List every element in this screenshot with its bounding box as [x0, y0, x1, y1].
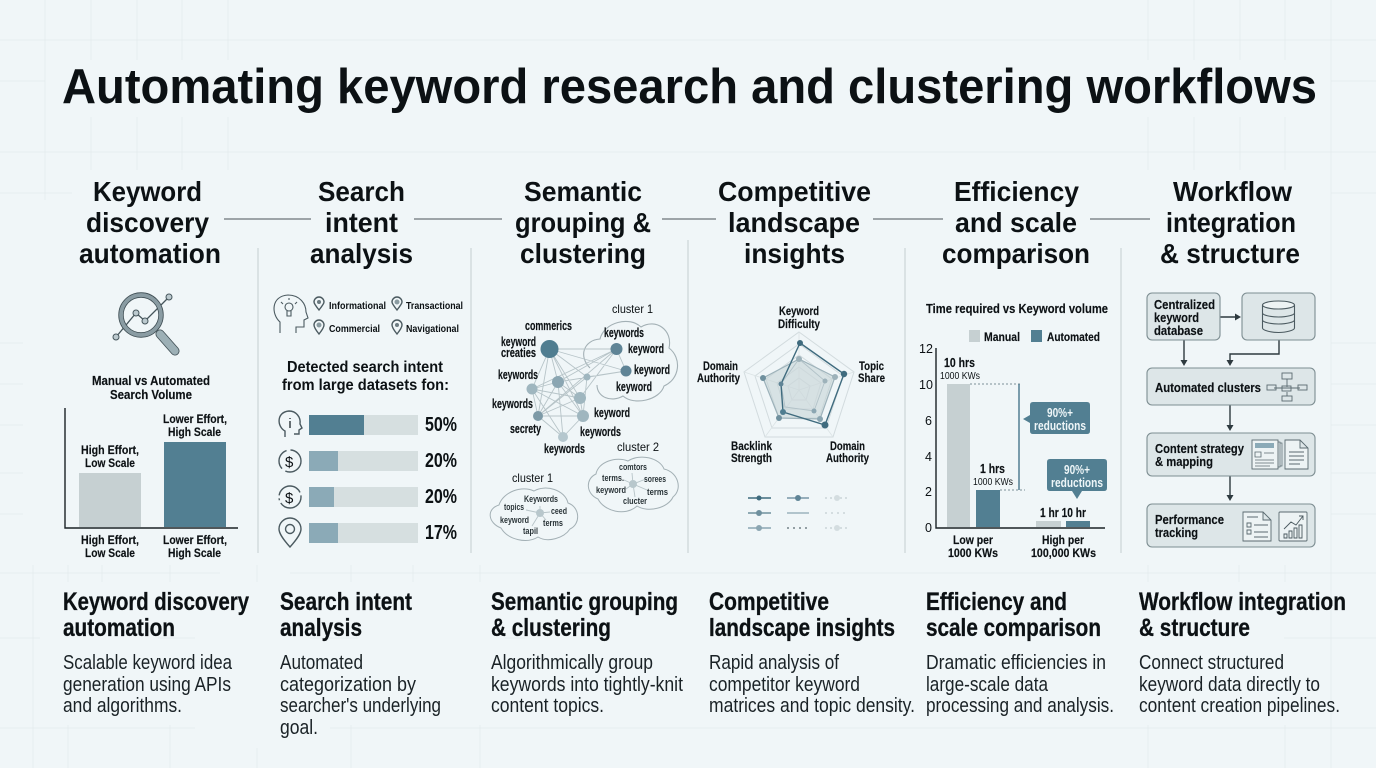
bar chart: time vs keyword volume: 12	[919, 342, 933, 356]
cloud: lower cluster 1: cluster 1	[512, 471, 553, 485]
heading: semantic grouping and clustering: grouping &	[515, 207, 651, 238]
box: content strategy and mapping: & mapping	[1155, 455, 1213, 469]
labels: radar axes: Keyword	[779, 306, 819, 318]
summary: semantic grouping and clustering: Algorithmically group	[491, 652, 653, 674]
cloud: cluster 2: comtors	[619, 462, 647, 473]
bar chart: time vs keyword volume: 6	[925, 414, 932, 428]
heading: workflow integration and structure	[1160, 176, 1300, 269]
box: performance tracking: tracking	[1155, 526, 1198, 540]
summary: keyword discovery automation: automation	[63, 614, 175, 642]
heading: semantic grouping and clustering: Semantic	[524, 176, 642, 207]
box: performance tracking: Performance	[1155, 513, 1224, 527]
summary: semantic grouping and clustering: Semantic grouping	[491, 588, 678, 616]
bar chart: effort vs scale: High Scale	[168, 427, 221, 439]
summary: efficiency and scale comparison: scale comparison	[926, 614, 1101, 642]
summary: search intent analysis: Search intent	[280, 588, 413, 616]
chart title: manual vs automated: Manual vs Automated	[92, 374, 210, 388]
callout: 90%+ reductions upper	[1023, 402, 1090, 434]
box: centralized keyword database: keyword	[1154, 311, 1199, 325]
bar chart: time vs keyword volume	[919, 342, 1105, 560]
panel: competitive landscape insights	[697, 176, 915, 717]
heading: workflow integration and structure: Workflow	[1173, 176, 1292, 207]
summary: competitive landscape insights: competitor keyword	[709, 674, 860, 696]
panel: semantic grouping and clustering	[490, 176, 683, 717]
summary: competitive landscape insights: landscape insights	[709, 614, 895, 642]
labels: radar axes: Domain	[703, 361, 738, 373]
summary: competitive landscape insights: Rapid analysis of	[709, 652, 839, 674]
flowchart: workflow pipeline	[1147, 293, 1315, 547]
bar chart: effort vs scale: High Effort,	[81, 535, 139, 547]
bar chart: time vs keyword volume: 1 hr 10 hr	[1040, 506, 1086, 520]
box: database icon	[1242, 293, 1315, 340]
bar chart: effort vs scale	[65, 408, 238, 560]
summary: efficiency and scale comparison: processing and analysis.	[926, 695, 1114, 717]
labels: network keywords: keywords	[580, 425, 621, 439]
cloud: cluster 2: clucter	[623, 496, 647, 507]
callout: 90%+ reductions upper: reductions	[1034, 418, 1086, 433]
heading: semantic grouping and clustering	[515, 176, 651, 269]
legend: radar series	[748, 495, 849, 531]
legend: intent types: Transactional	[406, 300, 463, 312]
labels: network keywords: secrety	[510, 422, 541, 436]
labels: network keywords: keywords	[498, 368, 538, 382]
bar chart: effort vs scale: Low Scale	[85, 548, 135, 560]
bar chart: time vs keyword volume: 2	[925, 485, 932, 499]
labels: radar axes: Difficulty	[778, 319, 821, 331]
heading: search intent analysis	[310, 176, 413, 269]
icon: head with lightbulb	[274, 295, 308, 333]
summary: competitive landscape insights: Competitive	[709, 588, 829, 616]
heading: competitive landscape insights	[718, 176, 871, 269]
labels: network keywords: keywords	[544, 442, 585, 456]
cloud: lower cluster 1: ceed	[551, 506, 567, 517]
network graph: keyword nodes	[526, 340, 632, 442]
heading: efficiency and scale comparison: Efficiency	[954, 176, 1079, 207]
summary: efficiency and scale comparison: large-scale data	[926, 674, 1049, 696]
legend: manual and automated: Manual	[984, 332, 1020, 344]
bar chart: time vs keyword volume: 10	[919, 378, 933, 392]
cloud: cluster 2	[588, 440, 678, 512]
box: centralized keyword database: database	[1154, 324, 1203, 338]
heading: efficiency and scale comparison: comparison	[942, 238, 1090, 269]
bar chart: intent shares: $	[285, 490, 294, 507]
bar chart: intent shares: 20%	[425, 450, 457, 472]
chart title: detected search intent: Detected search intent	[287, 359, 444, 376]
heading: competitive landscape insights: Competitive	[718, 176, 871, 207]
summary: keyword discovery automation: Scalable keyword idea	[63, 652, 233, 674]
summary: workflow integration and structure: content creation pipelines.	[1139, 695, 1340, 717]
heading: workflow integration and structure: integration	[1166, 207, 1296, 238]
heading: competitive landscape insights: landscape	[728, 207, 860, 238]
summary: efficiency and scale comparison: Dramatic efficiencies in	[926, 652, 1106, 674]
bar chart: intent shares	[279, 411, 457, 547]
bar chart: intent shares: 17%	[425, 522, 457, 544]
cloud: lower cluster 1: topics	[504, 502, 524, 513]
labels: network keywords	[492, 302, 670, 456]
bar chart: effort vs scale: Lower Effort,	[163, 414, 227, 426]
legend: intent types	[314, 297, 463, 335]
legend: intent types: Informational	[329, 300, 386, 312]
chart title: manual vs automated	[92, 374, 210, 402]
box: content strategy and mapping: Content strategy	[1155, 442, 1244, 456]
heading: search intent analysis: analysis	[310, 238, 413, 269]
bar chart: time vs keyword volume: Low per	[953, 535, 993, 547]
labels: network keywords: creaties	[501, 346, 536, 360]
bar chart: effort vs scale: High Effort,	[81, 445, 139, 457]
labels: network keywords: keyword	[501, 335, 536, 349]
bar chart: intent shares: $	[285, 454, 294, 471]
labels: network keywords: keyword	[634, 363, 670, 377]
bar chart: time vs keyword volume: 10 hrs	[944, 356, 975, 370]
cloud: cluster 2: sorees	[644, 474, 666, 485]
cloud: lower cluster 1: tapil	[523, 526, 538, 537]
labels: network keywords: cluster 1	[612, 302, 653, 316]
labels: network keywords: keywords	[604, 326, 644, 340]
summary: efficiency and scale comparison: Efficiency and	[926, 588, 1067, 616]
heading: keyword discovery automation	[79, 176, 221, 269]
box: centralized keyword database: Centralized	[1154, 298, 1215, 312]
summary: search intent analysis: searcher's underlying	[280, 695, 441, 717]
summary: search intent analysis: Automated	[280, 652, 363, 674]
summary: keyword discovery automation: generation using APIs	[63, 674, 231, 696]
summary: keyword discovery automation	[63, 588, 249, 717]
box: centralized keyword database	[1147, 293, 1220, 340]
panel: search intent analysis	[274, 176, 463, 739]
box: content strategy and mapping	[1147, 433, 1315, 476]
chart title: manual vs automated: Search Volume	[110, 388, 192, 402]
heading: search intent analysis: intent	[325, 207, 398, 238]
callout: 90%+ reductions lower: 90%+	[1064, 462, 1090, 477]
labels: radar axes: Authority	[697, 373, 741, 385]
chart title: detected search intent	[282, 359, 449, 394]
summary: search intent analysis	[280, 588, 441, 739]
heading: competitive landscape insights: insights	[744, 238, 845, 269]
callout: 90%+ reductions lower: reductions	[1051, 475, 1103, 490]
summary: competitive landscape insights	[709, 588, 915, 717]
labels: radar axes: Authority	[826, 453, 870, 465]
icon: magnifier with trend line	[113, 293, 175, 351]
cloud: lower cluster 1: Keywords	[524, 494, 558, 505]
cloud: cluster 2: keyword	[596, 485, 626, 496]
cloud: cluster 2: terms.	[602, 473, 624, 484]
chart title: time required: Time required vs Keyword volume	[926, 302, 1108, 316]
box: performance tracking	[1147, 504, 1315, 547]
heading: keyword discovery automation: discovery	[86, 207, 209, 238]
chart title: detected search intent: from large datasets fon:	[282, 377, 449, 394]
heading: search intent analysis: Search	[318, 176, 405, 207]
heading: keyword discovery automation: Keyword	[93, 176, 202, 207]
bar chart: time vs keyword volume: 1000 KWs	[973, 476, 1013, 488]
legend: manual and automated: Automated	[1047, 332, 1100, 344]
bar chart: intent shares: 50%	[425, 414, 457, 436]
heading: semantic grouping and clustering: clustering	[520, 238, 646, 269]
labels: radar axes: Backlink	[731, 441, 773, 453]
legend: intent types: Navigational	[406, 323, 459, 335]
heading: keyword discovery automation: automation	[79, 238, 221, 269]
bar chart: time vs keyword volume: 0	[925, 521, 932, 535]
heading: efficiency and scale comparison	[942, 176, 1090, 269]
bar chart: intent shares: 20%	[425, 486, 457, 508]
radar chart: competitive metrics	[744, 332, 854, 437]
summary: workflow integration and structure: keyword data directly to	[1139, 674, 1320, 696]
panel: keyword discovery automation	[63, 176, 249, 717]
legend: intent types: Commercial	[329, 323, 380, 335]
labels: network keywords: keyword	[616, 380, 652, 394]
summary: keyword discovery automation: and algorithms.	[63, 695, 182, 717]
arrows: flow connectors	[1180, 314, 1279, 501]
bar chart: time vs keyword volume: 1000 KWs	[940, 370, 980, 382]
summary: semantic grouping and clustering: keywords into tightly-knit	[491, 674, 683, 696]
cloud: cluster 1 outline	[584, 321, 678, 401]
legend: manual and automated	[969, 330, 1100, 344]
summary: semantic grouping and clustering	[491, 588, 683, 717]
summary: search intent analysis: analysis	[280, 614, 362, 642]
summary: efficiency and scale comparison	[926, 588, 1114, 717]
labels: radar axes: Domain	[830, 441, 865, 453]
callout: 90%+ reductions lower	[1047, 459, 1107, 499]
heading: workflow integration and structure: & structure	[1160, 238, 1300, 269]
summary: competitive landscape insights: matrices and topic density.	[709, 695, 915, 717]
panel: workflow integration and structure	[1139, 176, 1346, 717]
cloud: lower cluster 1: keyword	[500, 515, 529, 526]
summary: workflow integration and structure	[1139, 588, 1346, 717]
heading: efficiency and scale comparison: and scale	[955, 207, 1077, 238]
summary: workflow integration and structure: & structure	[1139, 614, 1250, 642]
cloud: lower cluster 1	[490, 471, 578, 540]
bar chart: time vs keyword volume: 1 hrs	[980, 462, 1005, 476]
cloud: cluster 2: cluster 2	[617, 440, 659, 454]
summary: search intent analysis: categorization by	[280, 674, 416, 696]
bar chart: time vs keyword volume: 4	[925, 450, 932, 464]
labels: network keywords: keyword	[628, 342, 664, 356]
labels: radar axes	[697, 306, 885, 465]
title: Automating keyword research and clustering workflows	[62, 60, 1317, 114]
bar chart: time vs keyword volume: High per	[1042, 535, 1084, 547]
labels: radar axes: Strength	[731, 453, 772, 465]
callout: 90%+ reductions upper: 90%+	[1047, 405, 1073, 420]
cloud: cluster 2: terms	[647, 487, 668, 498]
labels: network keywords: keyword	[594, 406, 630, 420]
panel: efficiency and scale comparison	[919, 176, 1114, 717]
summary: semantic grouping and clustering: content topics.	[491, 695, 604, 717]
box: automated clusters: Automated clusters	[1155, 381, 1261, 395]
labels: network keywords: keywords	[492, 397, 533, 411]
bar chart: time vs keyword volume: 1000 KWs	[948, 548, 998, 560]
summary: keyword discovery automation: Keyword discovery	[63, 588, 249, 616]
summary: search intent analysis: goal.	[280, 717, 318, 739]
bar chart: time vs keyword volume: 100,000 KWs	[1031, 548, 1096, 560]
summary: semantic grouping and clustering: & clustering	[491, 614, 611, 642]
labels: network keywords: commerics	[525, 319, 572, 333]
box: automated clusters	[1147, 368, 1315, 405]
labels: radar axes: Topic	[859, 361, 885, 373]
summary: workflow integration and structure: Connect structured	[1139, 652, 1284, 674]
bar chart: effort vs scale: Low Scale	[85, 458, 135, 470]
bar chart: effort vs scale: High Scale	[168, 548, 221, 560]
bar chart: effort vs scale: Lower Effort,	[163, 535, 227, 547]
labels: radar axes: Share	[858, 373, 885, 385]
cloud: lower cluster 1: terms	[543, 518, 563, 529]
